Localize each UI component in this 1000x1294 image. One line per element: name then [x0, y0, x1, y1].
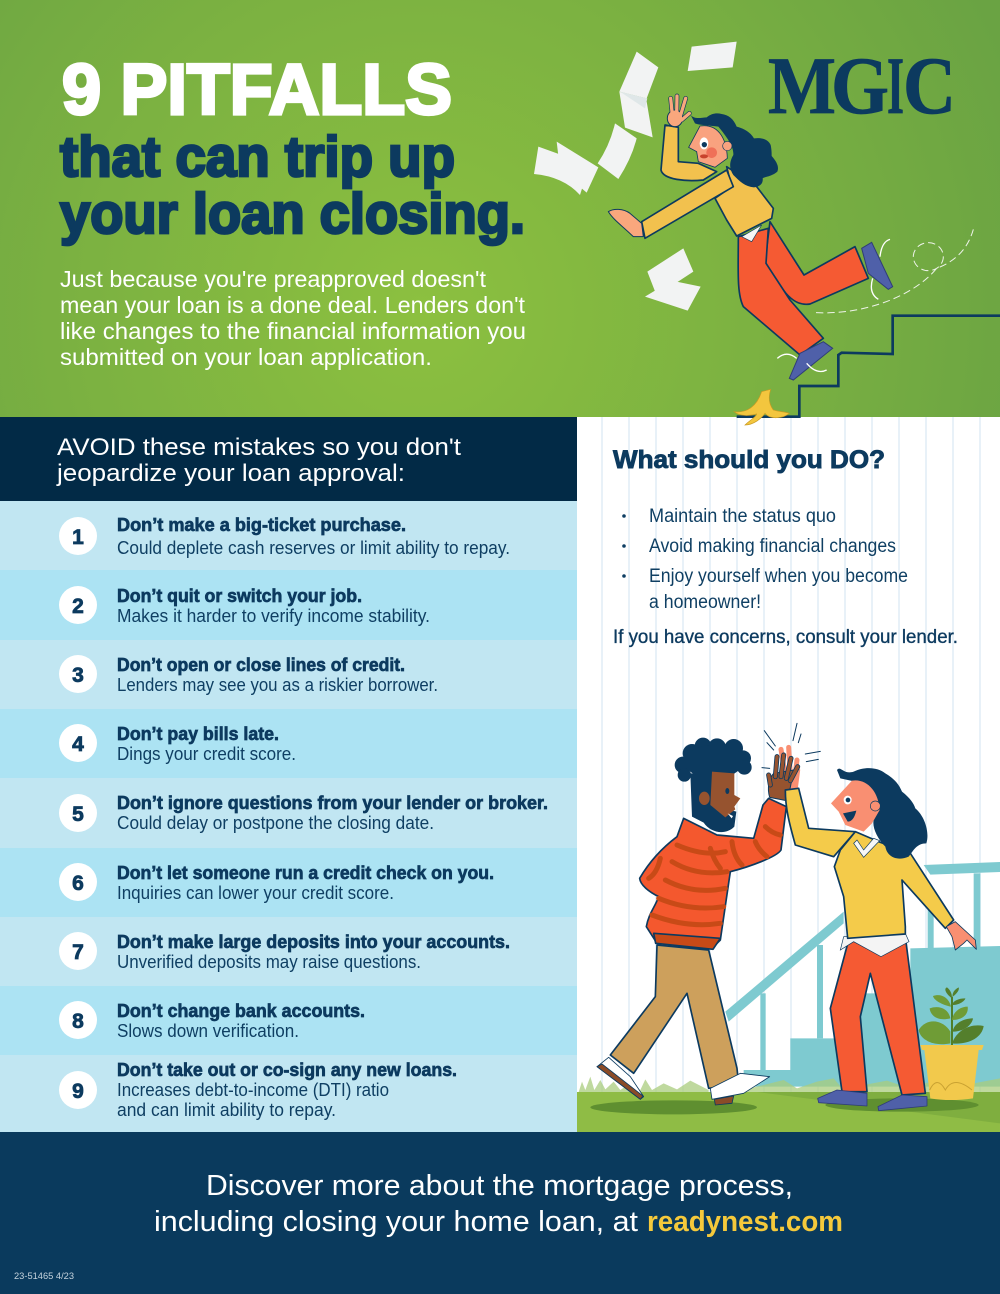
footer text line 2: including closing your home loan, at: [154, 1206, 638, 1238]
icon: flying papers: [534, 42, 737, 311]
logo: MGIC: M: [768, 40, 836, 131]
list item 6: Don’t let someone run a credit check on you.: [117, 862, 494, 883]
figure: outstretched hand: [608, 209, 643, 237]
list item 9: 9: [72, 1080, 84, 1103]
figure: woman trousers: [830, 937, 925, 1095]
list item 5: Don’t ignore questions from your lender or broker.: [117, 792, 548, 813]
list item 2: Makes it harder to verify income stability.: [117, 605, 430, 626]
logo: MGIC: [768, 40, 956, 131]
list item 1: Don’t make a big-ticket purchase.: [117, 514, 406, 535]
intro paragraph: like changes to the financial information you: [60, 318, 526, 344]
list item 8: 8: [72, 1010, 84, 1033]
figure: raised hand: [667, 96, 689, 127]
list item 7: 7: [72, 941, 84, 964]
icon: banana peel: [734, 389, 789, 425]
list item 7: [0, 917, 577, 986]
panel: green hero header: [0, 0, 1000, 425]
bullet list: [622, 506, 908, 613]
list item 3: [0, 640, 577, 709]
list item 4: 4: [72, 733, 84, 756]
list item 1: 1: [72, 526, 84, 549]
figure: man shoes: [597, 1057, 770, 1105]
figure: back leg trousers: [765, 222, 868, 304]
figure: shirt tail: [742, 225, 762, 242]
figure: woman free hand: [946, 922, 976, 950]
figure: woman face: [831, 780, 880, 832]
figure: sweater stripes: [649, 827, 780, 925]
figure: man ear and eye: [699, 788, 733, 818]
icon: high five spark lines: [762, 723, 820, 768]
list item 2: [0, 570, 577, 640]
list item 9: Don’t take out or co-sign any new loans.: [117, 1059, 457, 1080]
panel: footer call to action: [0, 1132, 1000, 1294]
figure: shoelaces: [777, 239, 890, 371]
figure: man trousers: [610, 945, 739, 1088]
bullet list: Enjoy yourself when you become: [649, 566, 908, 587]
list item 3: Lenders may see you as a riskier borrower.: [117, 674, 438, 695]
figure: sweater torso: [715, 167, 773, 236]
figure: woman sweater: [834, 832, 954, 938]
figure: outstretched arm: [642, 170, 733, 238]
icon: potted plant: [919, 987, 984, 1100]
closing note: If you have concerns, consult your lender.: [613, 627, 958, 648]
illustration: woman slipping on stairs: [534, 42, 1000, 425]
scene: grass: [577, 1077, 1000, 1132]
bullet list: a homeowner!: [649, 592, 761, 613]
logo: MGIC: G: [831, 40, 889, 131]
figure: woman face details: [843, 796, 880, 822]
list item 8: Slows down verification.: [117, 1020, 299, 1041]
list item 5: [0, 778, 577, 848]
list item 6: 6: [72, 872, 84, 895]
heading band: jeopardize your loan approval:: [56, 460, 405, 487]
document code: 23-51465 4/23: [14, 1271, 74, 1282]
list item 1: Could deplete cash reserves or limit ability to repay.: [117, 537, 510, 558]
list item 7: Unverified deposits may raise questions.: [117, 951, 421, 972]
list item 3: 3: [72, 664, 84, 687]
list item 5: 5: [72, 803, 84, 826]
list item 8: Don’t change bank accounts.: [117, 1000, 365, 1021]
list item 4: Don’t pay bills late.: [117, 723, 279, 744]
logo: MGIC: I: [887, 40, 904, 131]
panel: avoid list: [0, 417, 577, 1132]
illustration: couple high five: [577, 723, 1000, 1132]
figure: sneakers: [789, 242, 893, 380]
intro paragraph: Just because you're preapproved doesn't: [60, 266, 487, 292]
heading band: AVOID these mistakes so you don't: [57, 434, 461, 461]
footer link: readynest.com: [647, 1206, 843, 1238]
figure: man hand: [768, 755, 798, 801]
figure: face: [689, 126, 727, 167]
figure: raised arm: [661, 125, 717, 181]
intro paragraph: submitted on your loan application.: [60, 344, 432, 370]
figure: woman hand behind: [781, 747, 798, 788]
list item 9: [0, 1055, 577, 1132]
figure: man hair: [675, 738, 752, 832]
title: 9 pitfalls: 9 PITFALLS: [62, 51, 452, 130]
figure: man sweater: [640, 798, 786, 948]
heading band: [0, 417, 577, 501]
list item 7: Don’t make large deposits into your accounts.: [117, 931, 510, 952]
heading: what should you do: What should you DO?: [613, 446, 885, 474]
figure: front leg trousers: [738, 228, 823, 355]
figure: woman shirt tail: [840, 933, 909, 957]
list item 9: and can limit ability to repay.: [117, 1099, 336, 1120]
list item 4: [0, 709, 577, 778]
title: your loan closing: your loan closing.: [60, 182, 525, 246]
figure: woman raised arm: [785, 788, 855, 857]
list item 4: Dings your credit score.: [117, 743, 296, 764]
figure: sweater hem: [654, 933, 720, 949]
footer text line 1: Discover more about the mortgage process,: [206, 1170, 793, 1202]
scene: teal stairs: [725, 862, 1000, 1087]
title: that can trip up: that can trip up: [60, 125, 455, 189]
icon: dashed trip path: [816, 229, 973, 313]
intro paragraph: [60, 266, 526, 370]
figure: woman hair: [837, 768, 927, 859]
figure: hair: [691, 113, 778, 187]
figure: man face: [710, 772, 740, 817]
list item 2: 2: [72, 595, 84, 618]
icon: stairs outline: [737, 316, 1000, 417]
list item 6: Inquiries can lower your credit score.: [117, 882, 394, 903]
panel: what should you do: [577, 417, 1000, 1132]
bullet list: Avoid making financial changes: [649, 536, 896, 557]
list item 6: [0, 848, 577, 917]
list item 3: Don’t open or close lines of credit.: [117, 654, 405, 675]
list item 1: [0, 501, 577, 570]
figure: face details: [700, 137, 732, 158]
list item 9: Increases debt-to-income (DTI) ratio: [117, 1079, 389, 1100]
bullet list: Maintain the status quo: [649, 506, 836, 527]
intro paragraph: mean your loan is a done deal. Lenders don't: [60, 292, 526, 318]
figure: woman collar: [854, 838, 880, 857]
list item 2: Don’t quit or switch your job.: [117, 585, 362, 606]
list item 8: [0, 986, 577, 1055]
list item 5: Could delay or postpone the closing date.: [117, 812, 434, 833]
figure: woman shoes: [818, 1090, 927, 1111]
logo: MGIC: C: [903, 40, 956, 131]
